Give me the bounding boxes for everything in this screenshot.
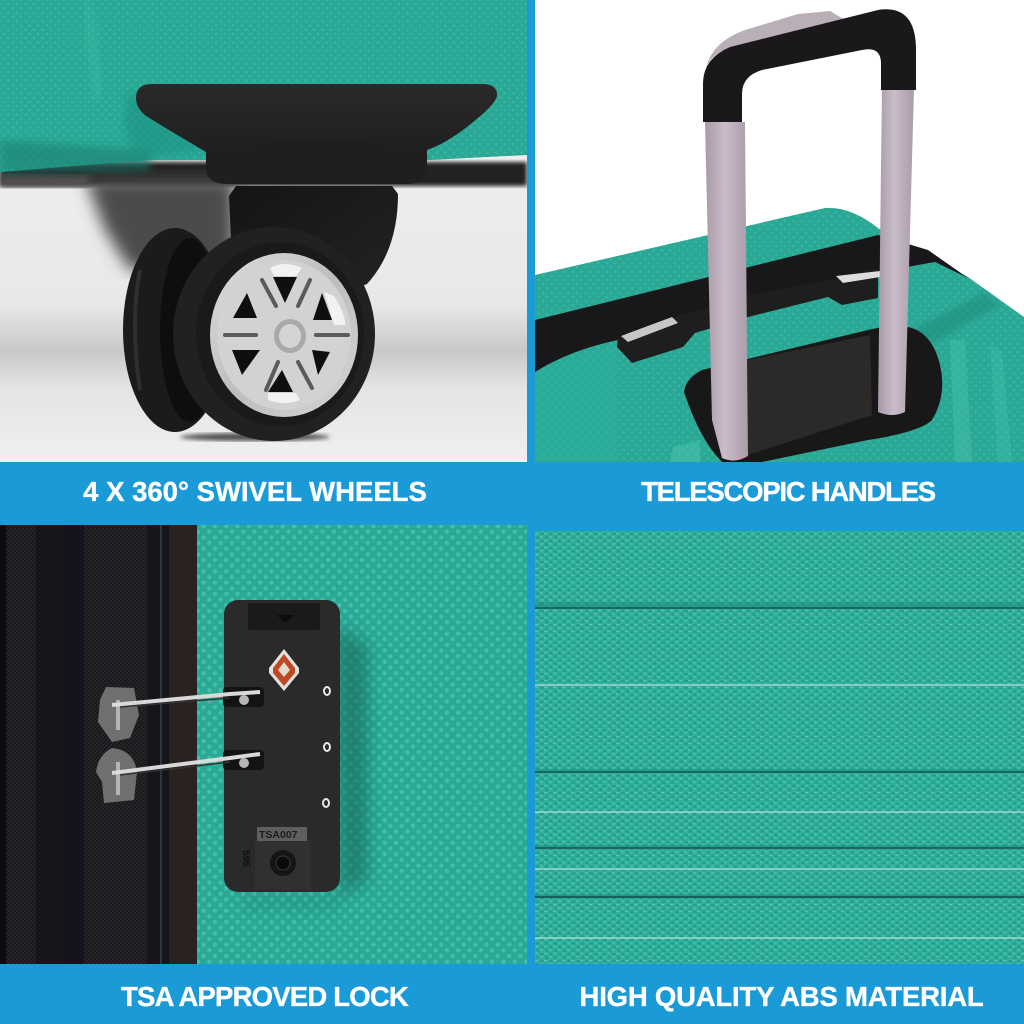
dark ridges [535, 602, 1024, 898]
caption: TSA lock: TSA APPROVED LOCK [121, 981, 408, 1012]
rear wheel [123, 228, 208, 432]
zipper edge strip [147, 525, 197, 964]
panel: ABS material photo [535, 531, 1024, 964]
caption: telescopic handles: TELESCOPIC HANDLES [641, 476, 935, 507]
handle well [684, 326, 942, 462]
handle grip [703, 9, 916, 122]
left handle pole [705, 122, 748, 461]
TSA lock [223, 600, 340, 892]
icon: TSA diamond [269, 649, 299, 691]
caption: swivel wheels: 4 X 360° SWIVEL WHEELS [83, 476, 427, 507]
rim windows [232, 277, 332, 392]
zipper pulls [96, 687, 260, 803]
floor contact shadow [180, 433, 330, 441]
right handle pole [878, 88, 914, 415]
panel: swivel wheel photo [0, 0, 527, 462]
caption: ABS material: HIGH QUALITY ABS MATERIAL [580, 981, 983, 1012]
TSA lock: 595 [240, 850, 251, 867]
case surface [197, 525, 527, 964]
rim spoke grooves [225, 280, 348, 390]
light ridges [535, 684, 1024, 939]
case shell [0, 0, 527, 174]
carry handle [617, 268, 880, 363]
zipper fabric [0, 525, 147, 964]
panel: telescopic handle photo [535, 0, 1024, 462]
case top [535, 208, 1024, 462]
wheel mount plate [136, 84, 497, 184]
panel: TSA lock photo [0, 525, 527, 964]
lock shadow [240, 625, 368, 905]
wheel fork [229, 186, 398, 286]
TSA lock: TSA007 [259, 829, 298, 841]
dark underside of case [0, 162, 527, 270]
zipper band [535, 235, 968, 372]
front wheel [173, 227, 375, 441]
